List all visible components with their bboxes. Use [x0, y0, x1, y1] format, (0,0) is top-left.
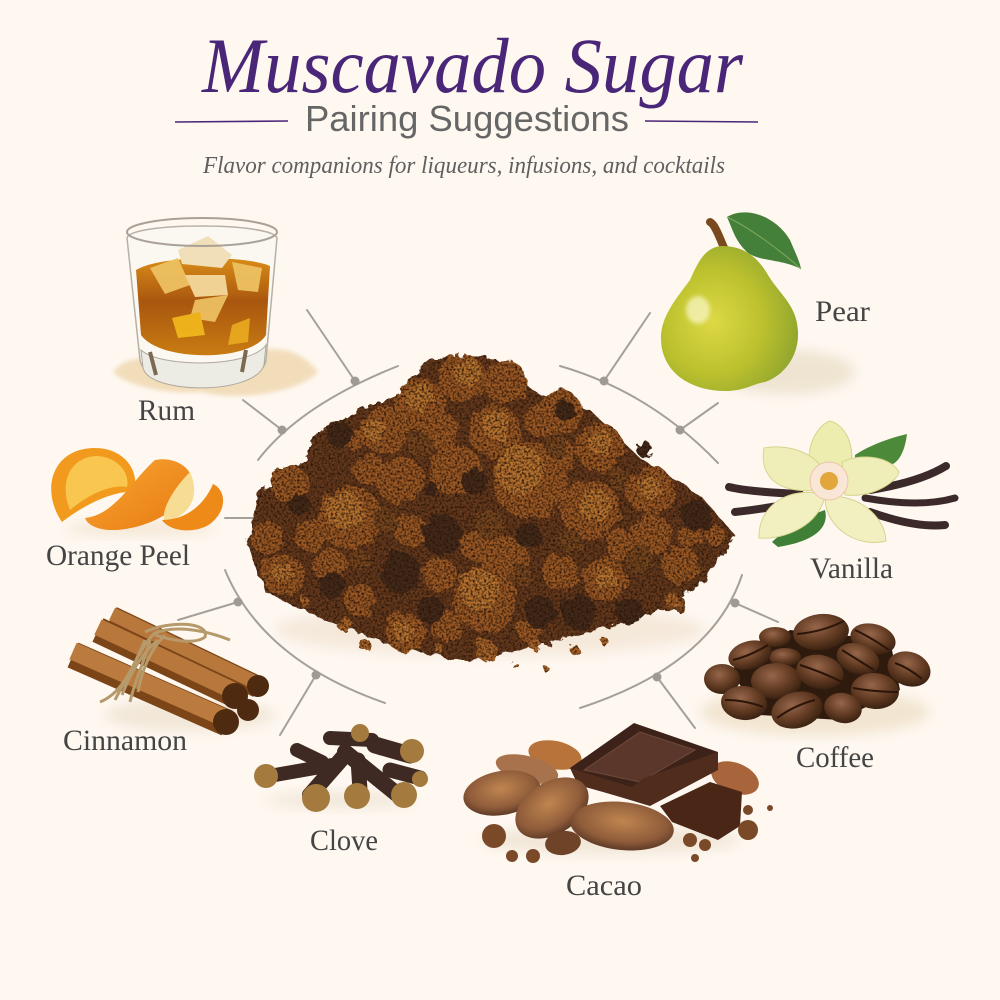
label: Cinnamon: Cinnamon	[63, 724, 187, 757]
label: Coffee: Coffee	[796, 741, 874, 774]
label: Orange Peel: Orange Peel	[46, 539, 190, 572]
icon: pear	[661, 212, 855, 394]
icon: rum glass	[113, 218, 318, 396]
icon: cinnamon bundle	[73, 614, 275, 735]
icon: orange peel	[51, 448, 223, 536]
icon: cloves	[254, 724, 428, 812]
icon: muscovado sugar pile	[247, 354, 735, 671]
label: Pear: Pear	[815, 295, 870, 328]
icon: vanilla flower and pods	[729, 421, 955, 547]
label: Cacao: Cacao	[566, 869, 642, 902]
title: Muscavado Sugar	[201, 22, 744, 109]
icon: coffee beans	[700, 611, 935, 736]
tagline: Flavor companions for liqueurs, infusions, and cocktails	[202, 153, 725, 179]
label: Clove: Clove	[310, 824, 378, 857]
connector lines	[178, 310, 778, 735]
label: Vanilla: Vanilla	[810, 552, 893, 585]
icon: cacao beans and chocolate	[460, 723, 773, 863]
label: Rum: Rum	[138, 394, 195, 427]
subtitle with side rules: Pairing Suggestions	[305, 98, 629, 139]
